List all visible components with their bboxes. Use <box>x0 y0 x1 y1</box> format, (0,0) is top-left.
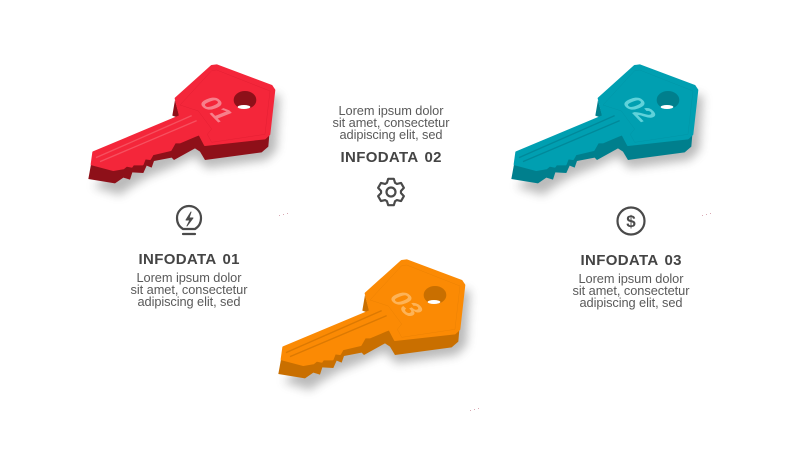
icon: dollar coin <box>618 208 644 234</box>
body 02: Lorem ipsum dolor <box>338 103 444 118</box>
number 01: 01 <box>192 93 241 125</box>
body 03 <box>572 271 690 310</box>
body 03: sit amet, consectetur <box>572 283 690 298</box>
body 02: adipiscing elit, sed <box>340 127 442 142</box>
number 02: 02 <box>615 93 664 125</box>
body 01: adipiscing elit, sed <box>138 294 240 309</box>
body 02: sit amet, consectetur <box>332 115 450 130</box>
icon: dollar coin: $ <box>626 212 636 231</box>
text block: infodata 01 <box>130 251 248 309</box>
body 02 <box>332 103 450 142</box>
body 01: sit amet, consectetur <box>130 282 248 297</box>
body 01 <box>130 270 248 309</box>
icon: gear <box>378 179 404 205</box>
body 03: Lorem ipsum dolor <box>578 271 684 286</box>
body 03: adipiscing elit, sed <box>580 295 682 310</box>
icon: light bulb with bolt <box>177 206 201 234</box>
text block: infodata 02 <box>332 103 450 166</box>
text block: infodata 03 <box>572 252 690 310</box>
key 03: orange <box>278 260 470 390</box>
faint specks <box>279 213 711 411</box>
body 01: Lorem ipsum dolor <box>136 270 242 285</box>
heading 03: INFODATA 03 <box>580 252 682 269</box>
heading 01: INFODATA 01 <box>138 251 240 268</box>
key 01: red <box>88 65 280 195</box>
heading 02: INFODATA 02 <box>340 149 442 166</box>
number 03: 03 <box>382 288 431 320</box>
key 02: teal <box>511 65 703 195</box>
